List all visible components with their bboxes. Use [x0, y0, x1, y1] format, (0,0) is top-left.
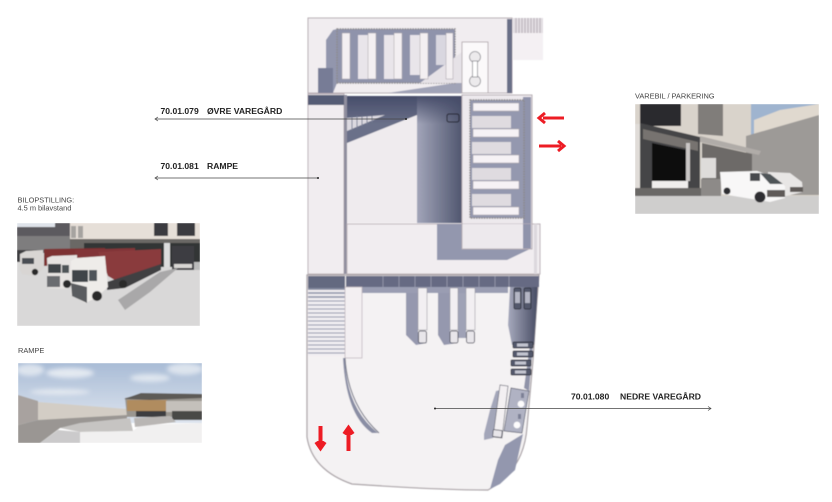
- right building roof: [462, 95, 532, 249]
- lower yard: [307, 275, 539, 490]
- upper yard: [347, 96, 462, 223]
- ramp strip: [308, 94, 347, 274]
- photo: ramp: [16, 363, 203, 443]
- caption: varebil parkering: VAREBIL / PARKERING: [635, 92, 715, 100]
- bus and pad: [484, 385, 529, 440]
- caption: bilopstilling: 4.5 m bilavstand: [18, 204, 71, 212]
- leader and label: øvre varegård: 70.01.079: [160, 106, 199, 116]
- arrow: down lower yard: [314, 426, 326, 452]
- leader and label: øvre varegård: [155, 106, 407, 121]
- parked vehicle: [447, 114, 459, 122]
- ramp floor: [60, 418, 133, 432]
- front truck: [106, 248, 162, 280]
- leader and label: nedre varegård: NEDRE VAREGÅRD: [620, 392, 701, 402]
- front van: [720, 171, 785, 202]
- stair ramp: [308, 276, 345, 288]
- leader and label: rampe: RAMPE: [207, 161, 238, 171]
- back truck: [44, 248, 105, 266]
- arrow: outbound upper yard: [539, 141, 564, 151]
- site plan: [307, 18, 543, 490]
- arrow: inbound upper yard: [539, 113, 564, 123]
- top right stair block: [513, 18, 543, 60]
- caption: bilopstilling: [18, 196, 74, 212]
- yard edge shadow: [508, 277, 538, 345]
- lift core: [462, 42, 488, 93]
- left wall: [18, 395, 38, 425]
- leader and label: rampe: [155, 161, 319, 180]
- pavilion: [124, 397, 202, 418]
- leader and label: øvre varegård: ØVRE VAREGÅRD: [207, 106, 282, 116]
- arrow: up lower yard: [342, 424, 354, 451]
- caption: bilopstilling: BILOPSTILLING:: [18, 196, 74, 204]
- cars: [511, 342, 533, 375]
- dock band: [346, 276, 539, 287]
- middle roof: [347, 95, 540, 274]
- leader and label: nedre varegård: [434, 392, 711, 410]
- curved wall: [343, 358, 378, 433]
- top building roof: [308, 18, 512, 93]
- dock shadow: [118, 268, 178, 310]
- leader and label: rampe: 70.01.081: [160, 161, 199, 171]
- back van: [768, 172, 803, 196]
- trucks: [406, 288, 475, 345]
- vans: [514, 288, 531, 309]
- photo: trucks at dock: [17, 223, 200, 326]
- leader and label: nedre varegård: 70.01.080: [571, 392, 609, 402]
- photo: van parking: [635, 104, 819, 214]
- middle truck: [104, 247, 136, 252]
- caption: rampe: RAMPE: [18, 346, 44, 355]
